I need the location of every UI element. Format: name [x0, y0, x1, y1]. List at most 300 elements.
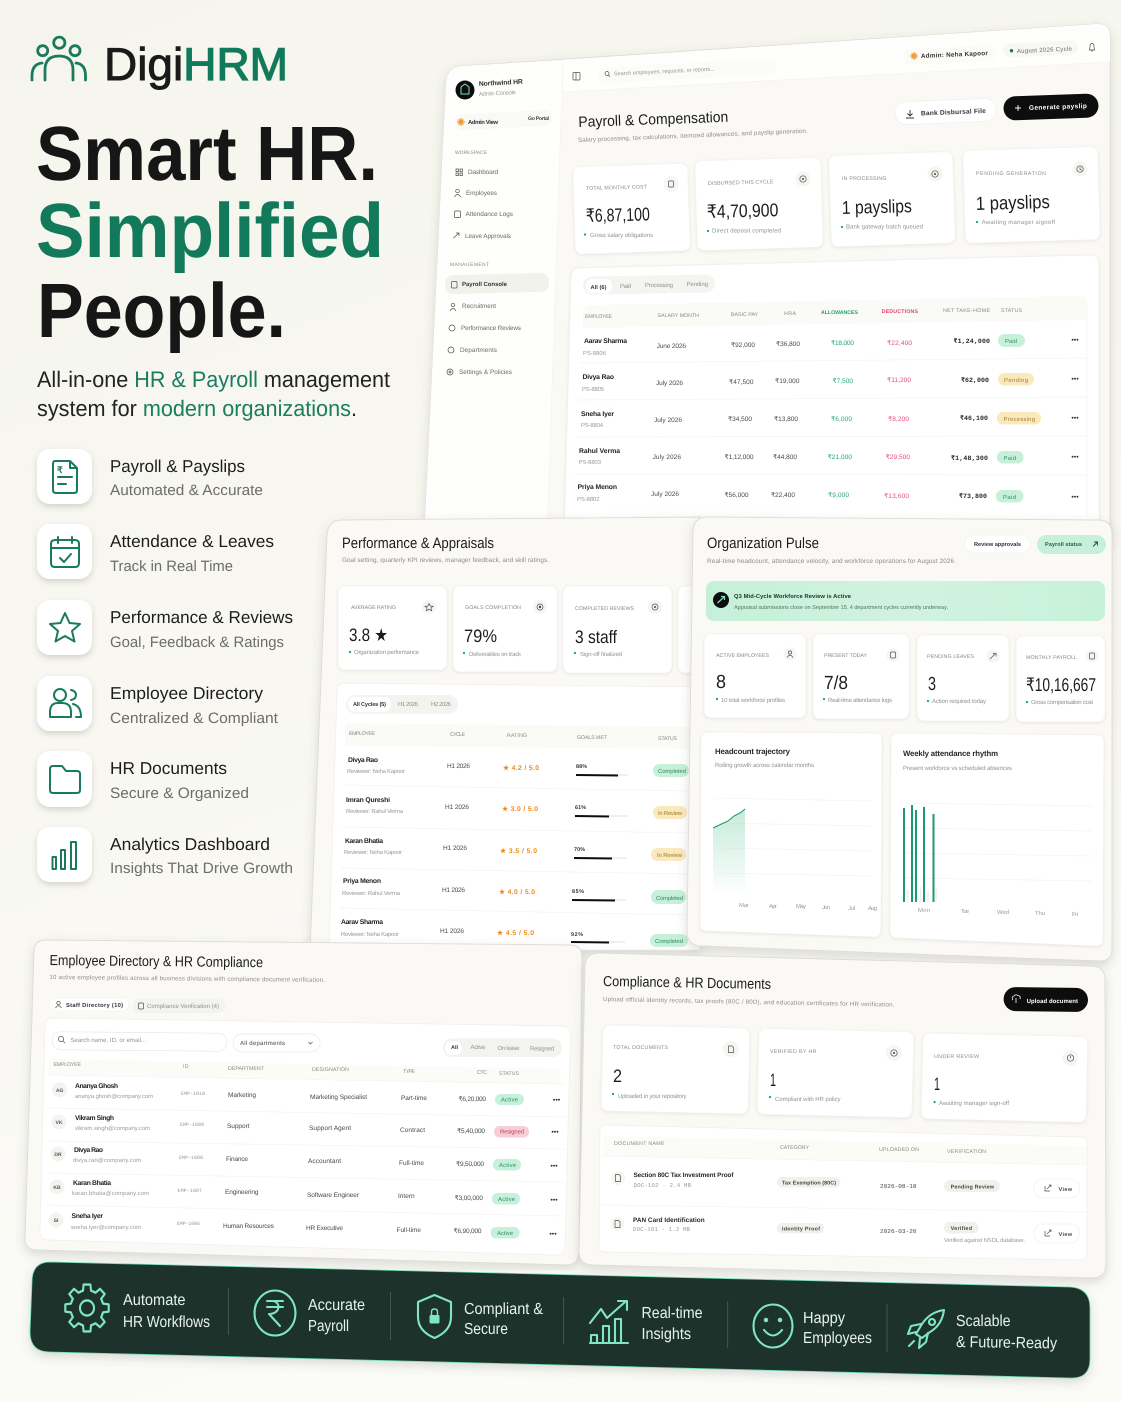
row: Section 80C Tax Investment Proof: Section 80C Tax Investment Proof [634, 1172, 734, 1179]
stat card: total documents: TOTAL DOCUMENTS [613, 1045, 668, 1051]
row: Sneha Iyer: Human Resources [223, 1223, 275, 1230]
band background [30, 1262, 1090, 1378]
row: Divya Rao: Accountant [308, 1158, 341, 1165]
button: Generate payslip: Generate payslip [1029, 103, 1087, 112]
row: Aarav Sharma: 92% [571, 932, 583, 938]
stat card: pending generation: 1 payslips [976, 192, 1050, 215]
row: Imran Qureshi: Reviewer: Rahul Verma [346, 808, 404, 815]
benefit: happy employees: Happy [803, 1310, 845, 1327]
feature: Performance & Reviews: Performance & Reviews [110, 607, 293, 627]
row: Vikram Singh: ₹5,40,000 [457, 1128, 485, 1135]
feature: Attendance & Leaves [37, 524, 274, 579]
row: PAN Card Identification [610, 1217, 1080, 1244]
heading: Performance & Appraisals [342, 535, 494, 552]
row: Divya Rao: divya.rao@company.com [73, 1157, 141, 1164]
feature list [37, 449, 293, 882]
stat card: total documents [601, 1025, 750, 1114]
feature: HR Documents: Secure & Organized [110, 785, 249, 802]
panel: organization pulse [687, 517, 1112, 961]
table header: EMPLOYEE [585, 314, 612, 320]
row: Karan Bhatia: Intern [398, 1193, 415, 1200]
table header: HRA [784, 311, 796, 317]
button: Payroll status: Payroll status [1045, 541, 1082, 548]
row: Rahul Verma: July 2026 [653, 454, 681, 461]
row: Priya Menon: ₹56,000 [724, 492, 749, 499]
row: Vikram Singh: Support [227, 1123, 250, 1130]
benefit: compliant and secure: Compliant & [464, 1301, 543, 1318]
row: Sneha Iyer: ₹13,800 [774, 416, 798, 423]
row: Ananya Ghosh: AG [56, 1088, 63, 1094]
table header: CTC [477, 1070, 487, 1076]
row: Divya Rao: Divya Rao [74, 1147, 103, 1154]
chart card: headcount trajectory: Rolling growth across calendar months [715, 762, 814, 769]
bar chart [904, 805, 936, 902]
row: Divya Rao: ₹7,500 [832, 378, 853, 385]
row: Priya Menon: 85% [572, 889, 584, 895]
row: PAN Card Identification: 2026-03-20 [880, 1228, 917, 1235]
row: Sneha Iyer: July 2026 [654, 417, 682, 424]
chart card: headcount trajectory: Mar [739, 902, 749, 909]
feature: Employee Directory: Employee Directory [110, 683, 263, 703]
stat card: active employees: 8 [716, 672, 726, 693]
row: Divya Rao: PS-8805 [582, 386, 605, 393]
sidebar navigation [445, 150, 549, 376]
table header: CATEGORY [780, 1145, 809, 1151]
row: Rahul Verma: ₹21,000 [828, 454, 852, 461]
row: Divya Rao: ₹11,200 [887, 377, 911, 384]
filter tabs: All (6) [590, 284, 607, 291]
heading: Compliance & HR Documents [603, 974, 771, 993]
logo: DigiHRM [32, 37, 288, 90]
alert banner [706, 581, 1105, 621]
headline [36, 111, 384, 354]
filter tabs: Pending [686, 281, 708, 288]
chart card: weekly attendance rhythm: Weekly attendance rhythm [903, 749, 998, 758]
row: Priya Menon: Reviewer: Rahul Verma [342, 890, 401, 897]
chart card: weekly attendance rhythm: Thu [1035, 910, 1045, 917]
table header: TYPE [403, 1069, 415, 1075]
table header: BASIC PAY [731, 312, 758, 318]
row: Sneha Iyer: ₹8,200 [888, 416, 909, 423]
directory table [40, 1018, 571, 1255]
heading: Organization Pulse [707, 535, 819, 552]
stat card: in processing: Bank gateway batch queued [846, 224, 923, 230]
row: Divya Rao [50, 1146, 558, 1170]
table header: CYCLE [450, 732, 465, 738]
sidebar navigation: Leave Approvals [465, 233, 511, 240]
row: Divya Rao: H1 2026 [447, 763, 470, 770]
row: Divya Rao: Completed [658, 768, 686, 775]
stat card: disbursed this cycle: Direct deposit completed [712, 228, 781, 234]
button: Review approvals [965, 535, 1030, 553]
icon: rocket [908, 1310, 944, 1348]
button: Upload document: Upload document [1027, 998, 1078, 1005]
row: Priya Menon: Priya Menon [578, 484, 617, 491]
sidebar navigation: Performance Reviews [461, 325, 521, 332]
feature: Payroll & Payslips: Payroll & Payslips [110, 456, 245, 476]
admin view switch: Admin View [468, 119, 498, 126]
row: Aarav Sharma: Completed [655, 938, 683, 945]
panel background [25, 940, 582, 1265]
stat card: active employees: 10 total workforce profiles [721, 697, 785, 704]
row: Sneha Iyer: Sneha Iyer [72, 1213, 103, 1220]
row: Ananya Ghosh: Ananya Ghosh [75, 1083, 118, 1090]
benefits band [30, 1262, 1090, 1378]
row: PAN Card Identification: Verified against NSDL database. [944, 1237, 1025, 1244]
chart card: weekly attendance rhythm: Wed [997, 909, 1009, 916]
row: Ananya Ghosh: Part-time [401, 1095, 427, 1102]
benefit: scalable and future-ready: Scalable [956, 1313, 1011, 1330]
top bar: Search employees, requests, or reports... [614, 67, 715, 77]
row: Aarav Sharma: ★ 4.5 / 5.0 [497, 929, 534, 937]
row: Imran Qureshi: ★ 3.0 / 5.0 [502, 805, 538, 813]
table header: DEDUCTIONS [882, 309, 919, 315]
sidebar navigation: Employees [466, 190, 497, 197]
cycle tabs [346, 695, 458, 714]
stat card: average rating: Organization performance [354, 649, 420, 656]
table header [48, 1059, 561, 1084]
stat card: average rating: AVERAGE RATING [351, 605, 396, 611]
row: Priya Menon: Completed [656, 895, 683, 902]
status filter: All [451, 1045, 458, 1051]
benefit: automate HR workflows [65, 1285, 210, 1331]
row: Karan Bhatia: karan.bhatia@company.com [72, 1190, 149, 1197]
row: Karan Bhatia [344, 838, 686, 861]
headline: Smart HR. [36, 111, 378, 197]
row: PAN Card Identification: View [1059, 1232, 1073, 1238]
stat card: disbursed this cycle: DISBURSED THIS CYCLE [708, 179, 774, 187]
row: Sneha Iyer: Processing [1004, 416, 1035, 423]
row: Aarav Sharma: H1 2026 [440, 928, 464, 935]
row: Priya Menon: ₹13,600 [884, 493, 909, 500]
stat card: disbursed this cycle: ₹4,70,900 [707, 199, 779, 222]
row: Divya Rao: ••• [550, 1163, 558, 1170]
tab: compliance verification [133, 999, 226, 1013]
subheading: Upload official identity records, tax proofs (80C / 80D), and education certificates for HR verification. [603, 996, 895, 1009]
row: Karan Bhatia: 70% [574, 847, 585, 853]
stat card: total monthly cost: TOTAL MONTHLY COST [586, 184, 648, 192]
row: Section 80C Tax Investment Proof: DOC-102 · 2.4 MB [634, 1182, 692, 1189]
benefit: scalable and future-ready [908, 1310, 1057, 1352]
stat card: present today [813, 634, 909, 719]
row: Sneha Iyer: ₹6,000 [831, 416, 852, 423]
feature: Performance & Reviews [37, 600, 293, 655]
row: Vikram Singh: EMP-1009 [180, 1122, 204, 1128]
benefit: real-time insights: Real-time [642, 1305, 703, 1322]
filter tabs: Paid [620, 283, 631, 290]
row: Divya Rao: Finance [226, 1156, 248, 1163]
panel background [424, 24, 1110, 540]
stat card: verified by HR: Compliant with HR policy [775, 1096, 840, 1103]
panel background [310, 517, 700, 950]
chart card: headcount trajectory: Apr [769, 903, 777, 910]
top bar: August 2026 Cycle [1017, 46, 1073, 55]
stat card: pending generation: PENDING GENERATION [976, 171, 1046, 177]
table header: DESIGNATION [312, 1067, 349, 1073]
row: PAN Card Identification: PAN Card Identification [633, 1217, 705, 1224]
stat card: under review: 1 [934, 1074, 940, 1094]
row: Ananya Ghosh: Marketing Specialist [310, 1094, 367, 1101]
chart card: headcount trajectory: May [796, 903, 806, 910]
feature: Attendance & Leaves: Track in Real Time [110, 558, 233, 575]
active item: Payroll Console [445, 273, 549, 294]
table header: VERIFICATION [947, 1149, 986, 1155]
benefit: compliant and secure: Secure [464, 1321, 508, 1338]
filter tabs [583, 274, 715, 295]
icon: growth chart [590, 1301, 628, 1343]
filter tabs: Processing [645, 282, 673, 289]
stat card: under review: Awaiting manager sign-off [939, 1100, 1009, 1107]
stat card: verified by HR [757, 1028, 914, 1118]
row: Divya Rao: Divya Rao [348, 757, 378, 764]
row: Aarav Sharma: ₹36,800 [776, 341, 800, 348]
status filter: Active [470, 1044, 486, 1051]
row: Sneha Iyer [48, 1212, 557, 1238]
stat card: pending leaves: 3 [928, 674, 936, 695]
stat card: monthly payroll: ₹10,16,667 [1026, 674, 1096, 695]
feature: Analytics Dashboard [37, 827, 293, 882]
stat card: under review [921, 1033, 1088, 1123]
row: Divya Rao: 88% [576, 764, 587, 770]
sidebar background [424, 60, 563, 540]
stat card: completed reviews: 3 staff [575, 627, 618, 647]
chart card: headcount trajectory [700, 732, 882, 937]
stat card: total monthly cost: Gross salary obligations [590, 232, 653, 239]
row: Sneha Iyer: SI [54, 1218, 59, 1224]
stat card: average rating: 3.8 ★ [349, 625, 388, 645]
status filter: On leave [498, 1045, 520, 1052]
row: Priya Menon: July 2026 [651, 491, 679, 498]
row: Karan Bhatia [50, 1180, 558, 1204]
row: Divya Rao: ₹62,000 [961, 377, 989, 384]
status filter: Resigned [530, 1046, 554, 1052]
tagline: All-in-one HR & Payroll management [37, 367, 391, 392]
row: Karan Bhatia: H1 2026 [443, 845, 467, 852]
alert banner: Appraisal submissions close on September 15. 4 department cycles currently underway. [734, 604, 948, 611]
table header: EMPLOYEE [54, 1062, 81, 1068]
stat card: under review: UNDER REVIEW [934, 1054, 979, 1060]
row: Karan Bhatia: Engineering [225, 1189, 259, 1196]
cycle tabs: H1 2026 [398, 701, 419, 708]
row: Karan Bhatia: ••• [550, 1197, 558, 1204]
appraisals table [329, 683, 700, 950]
row: Divya Rao: Pending [1004, 377, 1028, 384]
row: Section 80C Tax Investment Proof: 2026-08-18 [880, 1183, 917, 1190]
header background [563, 24, 1110, 92]
row: Rahul Verma: PS-8803 [578, 459, 602, 466]
stat card: in processing [829, 151, 955, 247]
table header: DOCUMENT NAME [614, 1141, 665, 1147]
stat card: total documents: 2 [613, 1066, 622, 1086]
row: Divya Rao: ★ 4.2 / 5.0 [503, 764, 539, 772]
row: Aarav Sharma: Aarav Sharma [584, 338, 627, 345]
row: PAN Card Identification: Identity Proof [782, 1226, 820, 1232]
feature: Payroll & Payslips: Automated & Accurate [110, 482, 263, 499]
row: Ananya Ghosh [52, 1082, 561, 1105]
row: Karan Bhatia: Software Engineer [307, 1192, 360, 1199]
row: Priya Menon: H1 2026 [442, 887, 465, 894]
row: Divya Rao: Full-time [399, 1160, 424, 1167]
chart card: headcount trajectory: Aug [868, 905, 877, 912]
row: Sneha Iyer: HR Executive [306, 1225, 343, 1232]
row: PAN Card Identification: DOC-101 · 1.2 MB [633, 1226, 691, 1233]
row: Ananya Ghosh: ₹6,20,000 [458, 1096, 486, 1103]
cycle tabs: H2 2026 [431, 701, 452, 708]
row: Karan Bhatia: ★ 3.5 / 5.0 [500, 847, 537, 855]
row: Priya Menon: ★ 4.0 / 5.0 [499, 888, 535, 896]
row: Ananya Ghosh: EMP-1010 [181, 1091, 205, 1097]
sidebar navigation: Dashboard [468, 169, 498, 176]
panel: payroll and compensation [424, 24, 1110, 540]
icon: bell [1089, 44, 1095, 51]
row: Priya Menon [577, 484, 1079, 503]
row: Karan Bhatia: Active [498, 1196, 516, 1203]
chart card: headcount trajectory: Jun [822, 904, 830, 911]
sidebar navigation: Attendance Logs [466, 211, 513, 218]
stat card: present today: Real-time attendance logs [828, 697, 892, 704]
row: Divya Rao: July 2026 [656, 380, 683, 387]
feature: Employee Directory [37, 676, 279, 731]
feature: Analytics Dashboard: Analytics Dashboard [110, 834, 270, 854]
feature: Payroll & Payslips: ₹ [57, 465, 63, 475]
stat card: completed reviews [563, 586, 672, 673]
stat card: in processing: IN PROCESSING [842, 176, 886, 182]
sidebar navigation: MANAGEMENT [450, 262, 489, 268]
tab: compliance verification: Compliance Verification (4) [147, 1003, 219, 1010]
search box: Search name, ID, or email... [70, 1037, 146, 1044]
stat card: goals completion [453, 586, 557, 672]
icon: rupee [254, 1290, 296, 1336]
table header: STATUS [1001, 308, 1022, 314]
row: Aarav Sharma: Paid [1005, 338, 1017, 345]
heading: Payroll & Compensation [578, 109, 729, 131]
stat card: active employees [704, 634, 806, 718]
search box [52, 1032, 227, 1051]
button: Upload document [1003, 987, 1088, 1012]
alert banner: Q3 Mid-Cycle Workforce Review is Active [734, 593, 852, 600]
table header: STATUS [658, 736, 677, 742]
stat card: total monthly cost [573, 163, 690, 254]
feature: HR Documents: HR Documents [110, 758, 227, 778]
documents table [599, 1125, 1087, 1260]
area line chart [713, 809, 745, 896]
table header: ID [183, 1064, 189, 1070]
row: Aarav Sharma: ₹1,24,000 [954, 338, 990, 345]
brand: Northwind HR: Northwind HR [479, 79, 523, 88]
row: Priya Menon: Paid [1003, 494, 1016, 501]
row: Aarav Sharma: Reviewer: Neha Kapoor [341, 931, 399, 938]
table header: NET TAKE-HOME [943, 308, 990, 314]
subheading: Goal setting, quarterly KPI reviews, manager feedback, and skill ratings. [342, 557, 549, 564]
row: Aarav Sharma: ₹22,400 [887, 340, 912, 347]
stat card: total documents: Uploaded in your repository [618, 1093, 686, 1100]
row: Divya Rao [347, 757, 689, 777]
table header: EMPLOYEE [349, 731, 375, 737]
stat card: monthly payroll: MONTHLY PAYROLL [1026, 655, 1077, 661]
row: Rahul Verma: ₹1,48,300 [951, 455, 988, 462]
icon: smile [754, 1304, 792, 1348]
stat card: pending leaves [917, 635, 1009, 721]
row: Priya Menon: ₹73,800 [959, 493, 987, 500]
cycle tabs: All Cycles (5) [353, 701, 386, 708]
department filter [233, 1034, 320, 1052]
button: Payroll status [1037, 535, 1106, 554]
benefit: happy employees [754, 1304, 872, 1348]
row: Imran Qureshi: 61% [575, 805, 586, 811]
row: Section 80C Tax Investment Proof: View [1059, 1187, 1073, 1193]
headline: Simplified [36, 188, 384, 274]
benefit: scalable and future-ready: & Future-Ready [956, 1334, 1057, 1352]
benefit: accurate payroll: Payroll [308, 1318, 349, 1335]
row: Sneha Iyer [581, 411, 1079, 429]
benefit: happy employees: Employees [803, 1330, 872, 1347]
stat card: present today: 7/8 [824, 673, 848, 694]
row: Imran Qureshi: Imran Qureshi [346, 797, 390, 804]
row: Karan Bhatia: Karan Bhatia [345, 838, 383, 845]
row: Imran Qureshi: In Review [658, 810, 683, 817]
active item: Payroll Console: Payroll Console [462, 281, 508, 288]
row: Divya Rao: ₹47,500 [729, 379, 754, 386]
table header [603, 1136, 1086, 1165]
icon: people logo [32, 37, 86, 80]
feature: Analytics Dashboard: Insights That Drive Growth [110, 860, 293, 877]
table header: SALARY MONTH [658, 313, 699, 319]
stat card: monthly payroll [1016, 636, 1105, 722]
row: Vikram Singh [52, 1114, 559, 1138]
row: Karan Bhatia: In Review [657, 852, 683, 859]
panel: employee directory and HR compliance [25, 940, 582, 1265]
tab: staff directory [49, 998, 129, 1011]
row: Vikram Singh: Vikram Singh [75, 1115, 114, 1122]
stat card: completed reviews: COMPLETED REVIEWS [575, 606, 634, 612]
benefit: compliant and secure [418, 1295, 543, 1338]
row: Divya Rao: ₹9,50,000 [456, 1161, 484, 1168]
row: Vikram Singh: vikram.singh@company.com [75, 1125, 150, 1132]
row: Divya Rao: Reviewer: Neha Kapoor [347, 768, 405, 775]
sidebar navigation: Recruitment [462, 303, 496, 310]
admin view switch [455, 109, 553, 131]
row: Divya Rao: Divya Rao [582, 374, 614, 381]
brand: Northwind HR [456, 79, 523, 100]
row: Karan Bhatia: EMP-1007 [178, 1188, 202, 1194]
payroll table [564, 255, 1099, 540]
sidebar navigation: WORKSPACE [455, 150, 488, 156]
row: Ananya Ghosh: ••• [553, 1097, 561, 1104]
row: Karan Bhatia: Reviewer: Neha Kapoor [344, 849, 402, 856]
subheading: Real-time headcount, attendance velocity, and workforce operations for August 2026. [707, 558, 956, 565]
row: Aarav Sharma: PS-8806 [583, 350, 607, 357]
chart card: weekly attendance rhythm: Fri [1072, 911, 1078, 918]
row: Vikram Singh: ••• [551, 1129, 559, 1136]
benefit: real-time insights: Insights [642, 1326, 691, 1343]
row: Divya Rao: EMP-1008 [179, 1155, 203, 1161]
stat card: partially hidden [678, 586, 708, 673]
row: Aarav Sharma: ₹92,000 [731, 342, 755, 349]
row: Priya Menon: ₹9,000 [828, 492, 849, 499]
row: Vikram Singh: Resigned [500, 1128, 524, 1136]
table header: UPLOADED ON [879, 1147, 919, 1153]
chart card: weekly attendance rhythm: Mon [918, 907, 930, 914]
row: Sneha Iyer: ••• [549, 1231, 557, 1238]
stat card: disbursed this cycle [695, 157, 823, 251]
row: Ananya Ghosh: Marketing [228, 1092, 256, 1099]
feature: HR Documents [37, 751, 249, 807]
row: Aarav Sharma: ₹18,000 [831, 340, 854, 347]
icon: gear [65, 1285, 109, 1331]
top bar: Admin: Neha Kapoor [921, 50, 989, 60]
row: Divya Rao: ₹19,000 [775, 378, 800, 385]
stat card: goals completion: Deliverables on track [469, 651, 522, 658]
